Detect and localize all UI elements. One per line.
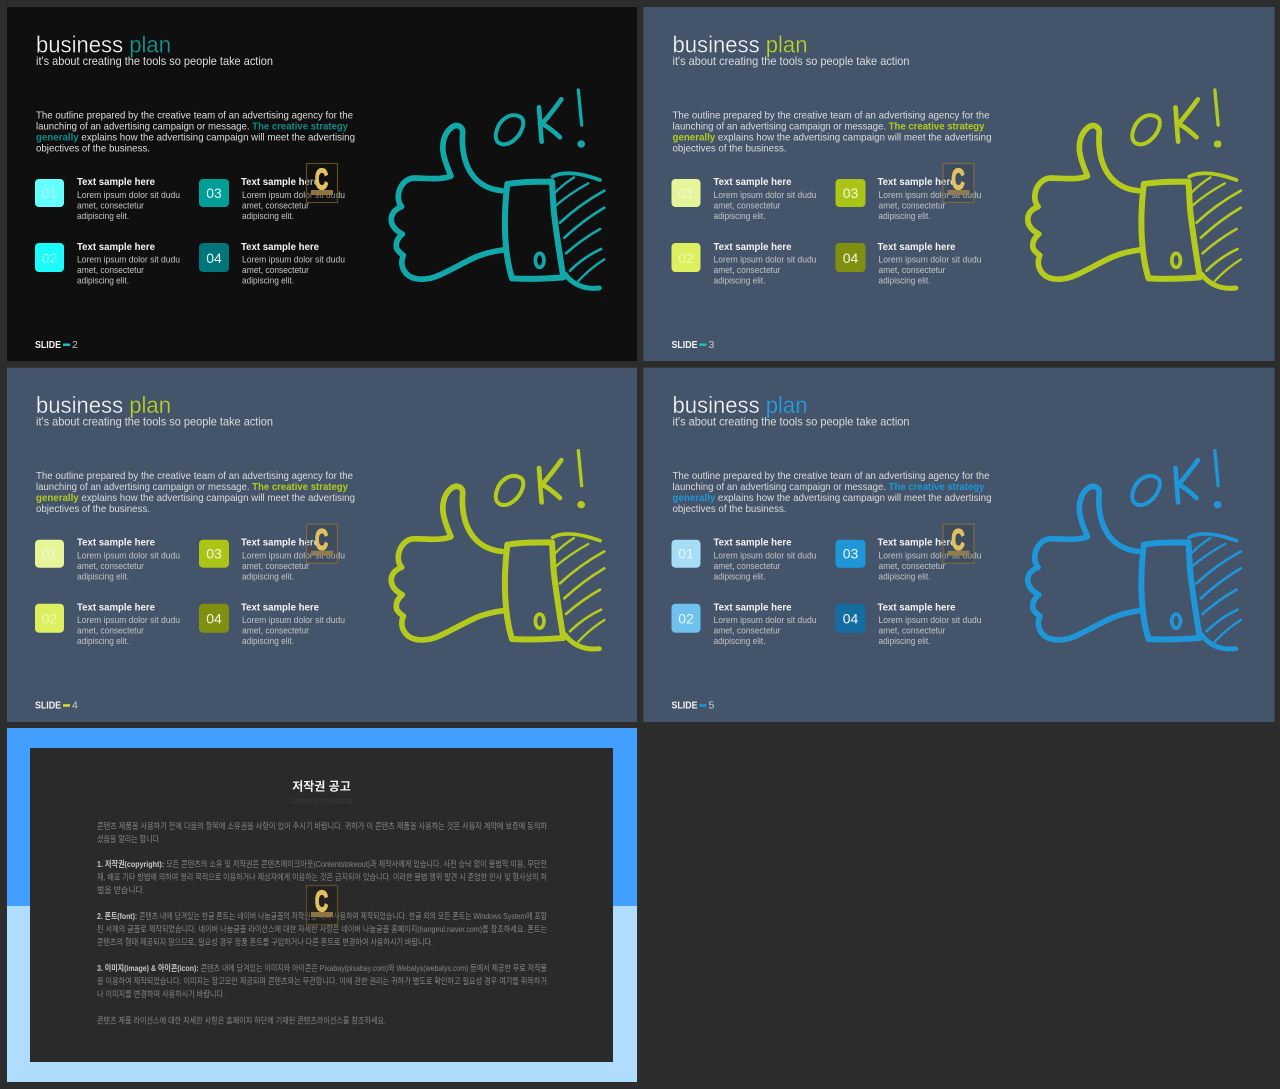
item 03: Text sample here [878, 176, 956, 188]
intro paragraph: The outline prepared by the creative team of an advertising agency for the [672, 110, 990, 122]
item 02: Text sample here [714, 241, 792, 253]
item 03: Lorem ipsum dolor sit dudu [242, 190, 345, 201]
item 03 [199, 176, 345, 222]
title: business plan [36, 392, 171, 418]
item 01: 01 [678, 546, 694, 562]
intro paragraph: generally explains how the advertising campaign will meet the advertising [36, 492, 355, 504]
intro paragraph: generally explains how the advertising campaign will meet the advertising [36, 132, 355, 144]
item 04: 04 [843, 250, 858, 266]
intro paragraph: generally explains how the advertising campaign will meet the advertising [672, 132, 992, 144]
item 02: adipiscing elit. [714, 636, 766, 647]
intro paragraph: objectives of the business. [36, 503, 150, 515]
item 01: adipiscing elit. [714, 211, 766, 222]
title: business plan [672, 32, 808, 58]
item 03 [199, 537, 345, 583]
item 01: 01 [42, 185, 57, 201]
item 02: Text sample here [77, 241, 155, 253]
slide number: SLIDE [35, 340, 61, 351]
item 02: adipiscing elit. [714, 276, 766, 286]
item 03: adipiscing elit. [242, 211, 294, 222]
notice intro: 콘텐츠 제품을 사용하기 전에 다음의 항목에 소유권을 사항이 있어 주시기 바랍니다. 귀하가 이 콘텐츠 제품을 사용하는 것은 사용자 계약에 보증에 동의하 [97, 821, 547, 831]
item 04: adipiscing elit. [878, 276, 930, 286]
slide number [672, 700, 714, 712]
notice section 3: 3. 이미지(image) & 아이콘(icon): 콘텐츠 내에 담겨있는 이미지와 아이콘은 Pixabay(pixabay.com)와 Webalys(webalys.com) 등에서 제공한 무료 저작물 [97, 963, 547, 973]
item 02: Text sample here [77, 602, 155, 614]
notice section 1: 벌을 받습니다. [97, 885, 145, 895]
notice section 1 [97, 859, 547, 895]
panel: slide 3 slate lime [644, 7, 1274, 361]
slide number: 3 [708, 339, 714, 351]
item 01: Lorem ipsum dolor sit dudu [714, 551, 816, 562]
title: business plan [672, 392, 808, 418]
item 03: amet, consectetur [878, 200, 946, 212]
item 01: amet, consectetur [714, 561, 780, 572]
item 04: amet, consectetur [242, 626, 309, 637]
item 02: amet, consectetur [77, 626, 144, 637]
item 01: Text sample here [77, 176, 155, 188]
subtitle: it's about creating the tools so people take action [672, 54, 910, 68]
item 01: amet, consectetur [77, 561, 144, 572]
item 03: amet, consectetur [242, 561, 309, 572]
item 02: amet, consectetur [714, 626, 780, 637]
item 03 [836, 176, 982, 222]
item 02 [672, 602, 816, 647]
intro paragraph: The outline prepared by the creative team of an advertising agency for the [36, 110, 353, 122]
item 04: amet, consectetur [878, 626, 946, 637]
item 03 [836, 537, 982, 583]
notice section 3 [97, 963, 547, 999]
item 03: adipiscing elit. [878, 572, 930, 583]
intro paragraph: launching of an advertising campaign or message. The creative strategy [672, 481, 985, 493]
slide number: SLIDE [35, 701, 61, 712]
item 03: adipiscing elit. [242, 572, 294, 583]
item 01: Lorem ipsum dolor sit dudu [77, 190, 180, 201]
item 03: 03 [206, 546, 222, 562]
item 04: 04 [206, 611, 222, 627]
notice section 3: 나 이미지를 변경하여 사용하시기 바랍니다. [97, 989, 225, 999]
icon: thumbs up OK [391, 90, 604, 288]
item 01: Lorem ipsum dolor sit dudu [714, 190, 816, 201]
item 04 [836, 602, 982, 647]
item 04: adipiscing elit. [242, 276, 294, 286]
notice section 3: 을 이용하여 제작되었습니다. 이미지는 참고모만 제공되며 콘텐츠와는 무관합니다. 이에 관한 권리는 귀하가 별도로 확인하고 필요성 경우 여기를 취득하거 [97, 976, 547, 986]
subtitle: it's about creating the tools so people take action [36, 54, 273, 68]
watermark badge [943, 524, 974, 563]
notice section 2: 콘텐츠의 형태 제공되지 않으므로, 필요성 경우 정품 폰트를 구입하거나 다른 폰트로 변경하여 사용하시기 바랍니다. [97, 937, 433, 947]
item 02: amet, consectetur [714, 265, 780, 276]
item 01: adipiscing elit. [77, 211, 129, 222]
item 01: amet, consectetur [77, 200, 144, 212]
item 04: amet, consectetur [878, 265, 946, 276]
slide number: SLIDE [672, 340, 698, 351]
intro paragraph [672, 470, 992, 515]
watermark badge: C [952, 525, 965, 557]
slide number [672, 339, 714, 351]
item 03: amet, consectetur [878, 561, 946, 572]
item 01: Text sample here [714, 176, 792, 188]
intro paragraph: The outline prepared by the creative team of an advertising agency for the [672, 470, 990, 482]
item 02: 02 [42, 611, 57, 627]
item 04: Lorem ipsum dolor sit dudu [878, 254, 982, 266]
watermark badge [943, 164, 974, 202]
slide number: 4 [72, 700, 78, 712]
item 04: 04 [843, 611, 858, 627]
item 04: Text sample here [241, 241, 319, 253]
watermark badge: C [315, 525, 328, 557]
item 01: 01 [42, 546, 57, 562]
item 01 [672, 176, 816, 222]
intro paragraph [672, 110, 992, 154]
panel: slide 5 slate blue [644, 368, 1274, 722]
panel: copyright notice [7, 728, 637, 1082]
item 04 [199, 241, 345, 286]
item 02: Lorem ipsum dolor sit dudu [77, 254, 180, 266]
intro paragraph: launching of an advertising campaign or message. The creative strategy [36, 120, 348, 132]
notice intro [97, 821, 547, 844]
notice section 1: 1. 저작권(copyright): 모든 콘텐츠의 소유 및 저작권은 콘텐츠메이크아웃(Contentstokeout)과 제작사에게 있습니다. 사전 승낙 없이 불법적 이용, 무단전 [97, 859, 547, 869]
watermark badge: C [315, 164, 328, 196]
slide number [35, 339, 78, 351]
item 04: Text sample here [241, 602, 319, 614]
item 02 [35, 241, 180, 286]
item 04: Text sample here [878, 241, 956, 253]
intro paragraph: launching of an advertising campaign or message. The creative strategy [36, 481, 348, 493]
item 03: 03 [206, 185, 222, 201]
item 02: 02 [42, 250, 57, 266]
item 03: Text sample here [241, 537, 319, 549]
item 03: Text sample here [241, 176, 319, 188]
item 04: adipiscing elit. [878, 636, 930, 647]
item 03: adipiscing elit. [878, 211, 930, 222]
watermark badge: C [952, 164, 965, 196]
panel: slide 4 slate lime [7, 368, 637, 722]
intro paragraph: objectives of the business. [672, 503, 786, 515]
slide number: SLIDE [672, 701, 698, 712]
slide number: 5 [708, 700, 714, 712]
item 03: amet, consectetur [242, 200, 309, 212]
notice section 1: 재, 배포 기타 방법에 의하여 영리 목적으로 이용하거나 제삼자에게 이용하는 것은 금지되어 있습니다. 이러한 불법 행위 발견 시 준엄한 민사 및 형사상의 처 [97, 872, 547, 882]
watermark badge: C [315, 886, 328, 918]
item 01: Text sample here [714, 537, 792, 549]
slide number: 2 [72, 339, 78, 351]
item 03: Text sample here [878, 537, 956, 549]
item 02: Lorem ipsum dolor sit dudu [77, 615, 180, 626]
item 04: Lorem ipsum dolor sit dudu [878, 615, 982, 626]
item 01: 01 [678, 185, 694, 201]
subtitle: it's about creating the tools so people take action [672, 415, 910, 429]
item 01 [35, 176, 180, 222]
item 04 [836, 241, 982, 286]
icon: thumbs up OK [391, 451, 604, 649]
notice section 2: 2. 폰트(font): 콘텐츠 내에 담겨있는 한글 폰트는 네이버 나눔글꼴의 저작권을 따라 사용하여 제작되었습니다. 한글 외의 모든 폰트는 Windows System에 포함 [97, 911, 547, 921]
intro paragraph [36, 110, 355, 154]
title: business plan [36, 32, 171, 58]
watermark badge [306, 886, 338, 924]
item 02: Lorem ipsum dolor sit dudu [714, 254, 816, 266]
watermark badge [306, 164, 338, 202]
intro paragraph [36, 470, 355, 515]
item 02: 02 [678, 611, 694, 627]
item 01 [35, 537, 180, 583]
item 03: 03 [843, 185, 858, 201]
item 04: Text sample here [878, 602, 956, 614]
item 01: adipiscing elit. [77, 572, 129, 583]
item 01: adipiscing elit. [714, 572, 766, 583]
item 02: adipiscing elit. [77, 636, 129, 647]
icon: thumbs up OK [1028, 90, 1241, 288]
item 01 [672, 537, 816, 583]
item 02: Lorem ipsum dolor sit dudu [714, 615, 816, 626]
notice section 2: 된 서체의 글꼴로 제작되었습니다. 네이버 나눔글꼴 라이선스에 대한 자세한 사항은 네이버 나눔글꼴 홈페이지(hangeul.naver.com)를 참조하세요. 폰트는 [97, 924, 547, 934]
item 02: amet, consectetur [77, 265, 144, 276]
item 03: Lorem ipsum dolor sit dudu [878, 190, 982, 201]
intro paragraph: The outline prepared by the creative team of an advertising agency for the [36, 470, 353, 482]
intro paragraph: objectives of the business. [672, 142, 786, 154]
slide number [35, 700, 78, 712]
intro paragraph: generally explains how the advertising campaign will meet the advertising [672, 492, 992, 504]
copyright heading: 저작권 공고 [292, 778, 351, 794]
intro paragraph: launching of an advertising campaign or message. The creative strategy [672, 120, 985, 132]
item 01: Text sample here [77, 537, 155, 549]
intro paragraph: objectives of the business. [36, 142, 150, 154]
copyright subheading: Copyright Notice [290, 796, 353, 806]
notice intro: 셨음을 알리는 합니다. [97, 834, 161, 844]
item 01: amet, consectetur [714, 200, 780, 212]
item 04: Lorem ipsum dolor sit dudu [242, 254, 345, 266]
item 04: Lorem ipsum dolor sit dudu [242, 615, 345, 626]
item 02: Text sample here [714, 602, 792, 614]
item 04: amet, consectetur [242, 265, 309, 276]
panel: slide 2 black teal [7, 7, 637, 361]
subtitle: it's about creating the tools so people take action [36, 415, 273, 429]
item 03: 03 [843, 546, 858, 562]
item 02: adipiscing elit. [77, 276, 129, 286]
item 02 [35, 602, 180, 647]
item 03: Lorem ipsum dolor sit dudu [242, 551, 345, 562]
item 03: Lorem ipsum dolor sit dudu [878, 551, 982, 562]
item 04 [199, 602, 345, 647]
item 01: Lorem ipsum dolor sit dudu [77, 551, 180, 562]
item 02 [672, 241, 816, 286]
icon: thumbs up OK [1028, 451, 1241, 649]
item 04: adipiscing elit. [242, 636, 294, 647]
watermark badge [306, 524, 338, 563]
item 02: 02 [678, 250, 694, 266]
notice section 2 [97, 911, 547, 947]
notice footer: 콘텐츠 제품 라이선스에 대한 자세한 사항은 홈페이지 하단에 기재된 콘텐츠라이선스를 참조하세요. [97, 1016, 386, 1026]
item 04: 04 [206, 250, 222, 266]
